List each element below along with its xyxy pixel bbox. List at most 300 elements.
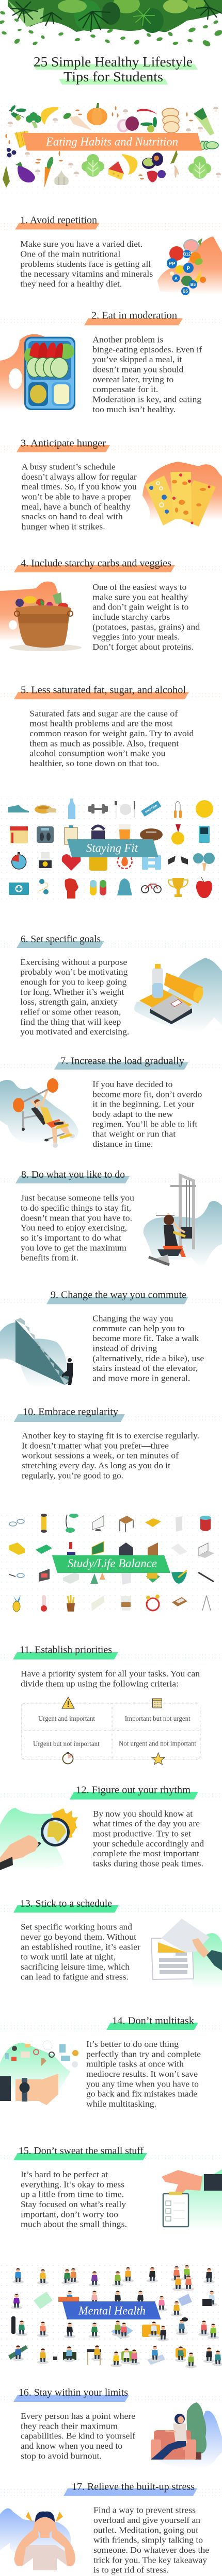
heading: [0, 1169, 222, 1183]
icon: bench press: [0, 1078, 78, 1148]
text block: them as much as possible. Also, frequent: [29, 738, 179, 748]
text block: problems students face is getting all: [20, 259, 151, 269]
icon: olives: [140, 117, 157, 132]
icon: boxing glove: [65, 878, 78, 899]
icon: bell: [117, 878, 132, 895]
icon: yoga mat: [89, 855, 107, 871]
icon: measuring tape: [35, 805, 56, 814]
panel: tip 3: [0, 438, 222, 532]
icon: cabinet: [148, 1543, 158, 1557]
panel: tip 13: [0, 1898, 222, 1989]
heading: 12. Figure out your rhythm: [76, 1785, 191, 1796]
icon: man climbing stairs: [0, 1318, 73, 1387]
text block: and move more in general.: [92, 1374, 190, 1383]
icon: stopwatch: [63, 1752, 73, 1764]
panel: study life balance banner: [0, 1514, 222, 1615]
icon: pumpkin: [87, 103, 107, 125]
text block: [92, 335, 202, 414]
text block: instead of driving: [92, 1344, 157, 1353]
icon: water bottle: [68, 799, 75, 819]
icon: coffee cup: [121, 1596, 131, 1611]
icon: gold medal: [171, 824, 184, 845]
text block: loss, strength gain, anxiety: [20, 997, 118, 1007]
icon: cucumber: [200, 141, 218, 149]
icon: vitamin foods: B5: [183, 289, 188, 294]
text block: Changing the way you: [92, 1314, 173, 1323]
matrix labels: Important but not urgent: [125, 1715, 191, 1722]
text block: [22, 462, 137, 532]
panel: tip 12: [0, 1785, 222, 1871]
text block: You need to enjoy exercising,: [21, 1223, 127, 1233]
text block: Find a way to prevent stress: [93, 2505, 196, 2515]
text block: become more fit, don’t overdo: [92, 1089, 202, 1099]
icon: thermometer: [41, 1595, 47, 1612]
ribbon: Staying Fit: [86, 842, 138, 855]
icon: folder: [145, 1518, 161, 1527]
icon: red beaker: [200, 1516, 211, 1531]
text block: common reason for weight gain. Try to avoid: [29, 728, 194, 738]
text block: [86, 2039, 201, 2109]
icon: protein bar: PROTEIN: [145, 804, 158, 814]
icon: shoe: [8, 805, 29, 812]
text block: By now you should know at: [93, 1809, 193, 1819]
icon: mat bottle and scale: [134, 958, 222, 1033]
text block: most productive. Try to set: [93, 1829, 191, 1838]
matrix labels: Not urgent and not important: [119, 1739, 196, 1748]
panel: mental health banner: [0, 2262, 222, 2368]
text block: binge-eating episodes. Even if: [92, 345, 202, 354]
panel: tip 14: [0, 2015, 222, 2109]
icon: supplement jar: [39, 852, 52, 871]
text block: multiple tasks at once with: [86, 2059, 184, 2069]
heading: [0, 1290, 222, 1304]
text block: become more fit. Take a walk: [92, 1333, 199, 1343]
text block: One of the easiest ways to: [92, 582, 186, 592]
ribbon: [52, 1555, 170, 1573]
panel: staying fit banner: [0, 799, 222, 900]
text block: and don’t gain weight is to: [92, 602, 188, 612]
icon: jump rope: [174, 802, 182, 818]
icon: banana: [122, 154, 137, 175]
text block: for long. Whether it’s weight: [20, 987, 124, 997]
icon: football: [140, 828, 163, 841]
text block: you any time when you have to: [86, 2079, 199, 2089]
icon: vitamin foods: P: [187, 266, 191, 272]
icon group: row 3 people: [11, 2316, 219, 2341]
text block: [21, 2170, 127, 2229]
text block: tasks during those peak times.: [93, 1859, 203, 1868]
text block: (potatoes, pastas, grains) and: [92, 622, 200, 632]
text block: go back and fix mistakes made: [86, 2089, 197, 2099]
icon: herb sprig: [170, 149, 178, 164]
text block: body adapt to the new: [92, 1109, 173, 1119]
text block: doesn’t mean you should: [92, 365, 184, 374]
icon: dumbbell: [88, 804, 108, 814]
text block: A busy student’s schedule: [22, 462, 116, 472]
icon: blueberries: [7, 148, 17, 158]
icon: fire ring: [118, 854, 132, 869]
ribbon: Mental Health: [78, 2304, 146, 2317]
icon: medal: [13, 1595, 21, 1612]
icon: chalkboard: [92, 1541, 104, 1555]
heading: 6. Set specific goals: [21, 934, 101, 945]
heading: 8. Do what you like to do: [21, 1169, 125, 1180]
heading: 4. Include starchy carbs and veggies: [21, 557, 171, 569]
icons: nuts: [5, 106, 193, 179]
text block: someone. Do whatever does the: [93, 2545, 209, 2555]
text block: compensate for it.: [92, 384, 158, 394]
icon: garlic: [54, 170, 69, 185]
icon: calendar page: [151, 1919, 222, 1989]
icon: flasks: [90, 1572, 105, 1584]
panel: tip 10: [0, 1406, 222, 1480]
icon: stopwatch: [12, 852, 26, 869]
text block: meal times. So, if you know you: [22, 482, 137, 492]
icon: music player: [199, 826, 210, 843]
icon: trophy: [168, 878, 188, 897]
icon: vitamin foods: [157, 236, 222, 295]
text block: and know when you need to: [21, 2441, 122, 2451]
text block: to do specific things to stay fit,: [21, 1203, 131, 1213]
text block: Set specific working hours and: [21, 1922, 133, 1932]
text block: you motivated and exercising.: [20, 1027, 129, 1037]
icon: herb: [3, 166, 10, 188]
icon: microscope: [67, 1542, 75, 1555]
text block: [93, 1809, 204, 1868]
text block: Moderation is key, and eating: [92, 395, 201, 404]
text block: that weight or run that: [92, 1129, 176, 1139]
text block: overload and give yourself an: [93, 2515, 200, 2525]
title: Tips for Students: [64, 69, 163, 84]
text block: It’s hard to be perfect at: [21, 2170, 108, 2179]
icon: ticket: [91, 1596, 104, 1611]
text block: is to get rid of stress.: [93, 2565, 169, 2575]
icon: avocado: [142, 152, 163, 169]
heading: 10. Embrace regularity: [23, 1406, 118, 1418]
heading: 1. Avoid repetition: [20, 215, 97, 226]
text block: Saturated fats and sugar are the cause of: [29, 708, 178, 718]
icon: desk lamp: [66, 1514, 78, 1533]
heading: [0, 1898, 222, 1913]
text block: up a little from time to time.: [21, 2190, 124, 2199]
icon: pencil cup: [67, 1595, 75, 1612]
icon: pills: [90, 880, 106, 895]
icon: bathroom scale: [37, 826, 54, 843]
icon: ping pong paddles: [193, 853, 215, 871]
heading: 5. Less saturated fat, sugar, and alcohol: [21, 684, 186, 696]
icon: first aid kit: [9, 883, 29, 895]
text block: [22, 1431, 199, 1480]
text block: Exercising without a purpose: [20, 957, 127, 967]
text block: while multitasking.: [86, 2099, 156, 2109]
icon: kettlebell: [91, 826, 105, 841]
text block: divide them up using the following criteria:: [21, 1679, 179, 1688]
text block: stairs instead of the elevator,: [92, 1363, 198, 1373]
icon: juice glass: [119, 824, 131, 841]
icon group: row 1 people: [12, 2265, 215, 2291]
icon: school building: [146, 1572, 160, 1583]
text block: include starchy carbs: [92, 612, 170, 622]
icon: snack bars: [142, 462, 222, 527]
text block: won’t be able to have a proper: [22, 492, 131, 502]
text block: stretching every day. As long as you do it: [22, 1461, 170, 1470]
icon: chili: [137, 109, 157, 114]
icon: lettuce: [188, 156, 211, 179]
table: priority matrix: [22, 1697, 200, 1765]
text block: workout sessions a week, or ten minutes of: [22, 1451, 179, 1461]
text block: make sure you eat healthy: [92, 592, 188, 602]
text block: most health problems and are the most: [29, 719, 173, 728]
text block: the necessary vitamins and minerals: [20, 269, 153, 279]
text block: they reach their maximum: [21, 2421, 118, 2431]
heading: 16. Stay within your limits: [19, 2387, 128, 2398]
icon: school bus: [9, 1543, 25, 1555]
icon: checkered flags: [168, 856, 188, 865]
text block: [29, 708, 194, 768]
text block: sacrificing leisure time, which: [21, 1962, 130, 1972]
icon: stressed person: [0, 2509, 75, 2570]
text block: [21, 2411, 136, 2461]
text block: [21, 1922, 141, 1981]
icon: eggplant: [15, 162, 35, 182]
icon group: row 2 people: [11, 2291, 217, 2316]
text block: an established routine, it’s easier: [21, 1942, 141, 1952]
panel: tip 6: [0, 934, 222, 1037]
icon: pen: [198, 1572, 214, 1582]
text block: complete the most important: [93, 1849, 199, 1858]
ribbon: [22, 133, 202, 150]
icon: vitamin foods: PP: [168, 261, 176, 267]
text block: important, don’t worry too: [21, 2209, 118, 2219]
heading: 13. Stick to a schedule: [20, 1898, 112, 1909]
text block: so it’s important to do what: [21, 1233, 121, 1243]
heading: [0, 557, 222, 572]
text block: [92, 582, 200, 652]
text block: If you have decided to: [92, 1079, 172, 1089]
text block: Have a priority system for all your tasks. You can: [21, 1669, 200, 1679]
icon: compass: [202, 1596, 211, 1611]
icon: leek: [194, 108, 214, 135]
text block: much about the small things.: [21, 2219, 127, 2229]
panel: tip 1: [0, 215, 222, 295]
panel: tip 2: [0, 310, 222, 414]
text block: regularly, you’re good to go.: [22, 1470, 123, 1480]
icon: lat pulldown machine: [144, 1173, 222, 1267]
panel: tip 11: [0, 1645, 222, 1765]
panel: tip 4: [0, 557, 222, 652]
text block: Every person has a point where: [21, 2411, 135, 2421]
icon: strawberry and plum: [147, 170, 166, 182]
text block: probably won’t be motivating: [20, 967, 128, 977]
matrix labels: Urgent but not important: [33, 1740, 100, 1748]
title: [33, 54, 198, 84]
text block: they need for a healthy diet.: [20, 279, 122, 289]
text block: capabilities. Be kind to yourself: [21, 2431, 136, 2441]
heading: 2. Eat in moderation: [91, 310, 177, 321]
icon: document: [176, 1516, 182, 1532]
icon: paper: [121, 1572, 131, 1585]
text block: [21, 1669, 200, 1688]
icon: computer: [39, 1569, 50, 1582]
text block: distance in time.: [92, 1139, 153, 1149]
text block: trick for you. The key takeaway: [93, 2555, 208, 2565]
text block: Just because someone tells you: [21, 1193, 134, 1203]
text block: Make sure you have a varied diet.: [20, 239, 142, 249]
ribbon: Study/Life Balance: [68, 1557, 157, 1570]
text block: snacks on hand to deal with: [22, 512, 123, 521]
text block: relief or some other reason,: [20, 1007, 121, 1017]
icon: parsnip: [62, 112, 92, 130]
panel: tip 17: [0, 2481, 222, 2575]
text block: you love to get the maximum: [21, 1243, 126, 1252]
heading: 15. Don’t sweat the small stuff: [19, 2145, 144, 2157]
heading: [0, 934, 222, 948]
heading: [0, 438, 222, 452]
icon: vitamin foods: B6: [191, 282, 196, 287]
icon: heart: [62, 854, 81, 871]
heading: [0, 2015, 222, 2030]
icon: banana: [41, 107, 58, 125]
text block: Don’t forget about proteins.: [92, 642, 194, 652]
icon: tennis ball: [196, 800, 213, 818]
heading: [0, 1406, 222, 1422]
icon: glasses: [9, 1519, 24, 1526]
text block: veggies into your meals.: [92, 632, 180, 642]
icon: calendar: [10, 826, 28, 843]
text block: It doesn’t matter what you prefer—three: [22, 1440, 169, 1450]
ribbon: Eating Habits and Nutrition: [45, 135, 178, 148]
text block: stop to avoid burnout.: [21, 2451, 102, 2461]
text block: One of the main nutritional: [20, 249, 121, 259]
text block: can lead to fatigue and stress.: [21, 1972, 129, 1981]
text block: [20, 957, 129, 1037]
icon: book stack: [119, 1543, 133, 1557]
text block: Another key to staying fit is to exercise regularly.: [22, 1431, 199, 1440]
text block: you’ve skipped a meal, it: [92, 354, 182, 364]
header foliage: [0, 0, 222, 47]
text block: [93, 2505, 209, 2575]
text block: benefits from it.: [21, 1253, 78, 1263]
text block: it in the beginning. Let your: [92, 1099, 195, 1109]
heading: [0, 215, 222, 230]
icon: monitor: [92, 1516, 104, 1531]
panel: tip 16: [0, 2387, 222, 2469]
icons: mushrooms: [8, 107, 221, 178]
icon: bicycle: [141, 884, 161, 893]
heading: 9. Change the way you commute: [51, 1290, 186, 1301]
text block: doesn’t mean that you have to.: [21, 1213, 132, 1223]
icon: star: [152, 1753, 165, 1765]
text block: regimen. You’ll be able to lift: [92, 1119, 198, 1129]
panel: tip 5: [0, 684, 222, 768]
heading: [0, 2387, 222, 2402]
icon: bread: [162, 108, 179, 133]
icon group: row 4 people: [8, 2345, 222, 2368]
icon: vitamin foods: A: [175, 276, 178, 281]
text block: (alternatively, ride a bike), use: [92, 1353, 204, 1363]
icon: projector: [63, 1572, 79, 1584]
icon: mortar: [171, 1570, 187, 1584]
text block: mediocre results. It won’t save: [86, 2069, 198, 2079]
text block: never go beyond them. Without: [21, 1932, 136, 1942]
icon: lettuce: [82, 154, 104, 177]
icon: person on armchair: [151, 2402, 222, 2469]
icon: clipboard: [65, 825, 77, 844]
icon: vitamin foods: B12: [183, 252, 191, 257]
icon: carrot: [44, 156, 55, 188]
icon: protein bar: [141, 801, 161, 817]
icon: watch and tasks: [0, 2041, 78, 2105]
text block: Stay focused on what’s really: [21, 2199, 126, 2209]
text block: meal, have a bunch of healthy: [22, 502, 131, 512]
text block: with friends, simply talking to: [93, 2535, 203, 2545]
heading: 14. Don’t multitask: [112, 2015, 194, 2026]
text block: Another problem is: [92, 335, 163, 344]
icon: broccoli: [26, 112, 41, 128]
text block: outlet. Meditation, going out: [93, 2525, 198, 2535]
text block: alcohol consumption won’t make you: [29, 749, 165, 758]
heading: [0, 2481, 222, 2496]
icon: alarm clock: [146, 1595, 160, 1611]
panel: tip 9: [0, 1290, 222, 1387]
title: 25 Simple Healthy Lifestyle: [34, 54, 193, 70]
text block: your schedule accordingly and: [93, 1839, 204, 1849]
icon: plate and cutlery: [115, 801, 135, 818]
icon: corn: [14, 131, 30, 148]
icon: calendar: [153, 1699, 162, 1708]
text block: doesn’t always allow for regular: [22, 472, 137, 482]
ribbon: [67, 839, 158, 857]
panel: eating habits banner: [0, 103, 222, 193]
icon: warning: [62, 1697, 74, 1708]
icon: test tube: [41, 1514, 47, 1533]
icon: magnifier and sun: [0, 1808, 78, 1871]
heading: 17. Relieve the built-up stress: [72, 2481, 195, 2493]
text block: to work until late at night,: [21, 1952, 116, 1962]
heading: [0, 2145, 222, 2160]
panel: tip 8: [0, 1169, 222, 1267]
text block: what times of the day you are: [93, 1819, 200, 1828]
heading: [0, 310, 222, 325]
icon: laptop: [199, 1543, 214, 1558]
icon: desk: [172, 1597, 187, 1606]
icon: hand and checklist: [162, 2169, 222, 2230]
icon: map pins: [38, 879, 49, 894]
heading: [0, 1785, 222, 1800]
icon: olive branch: [9, 105, 26, 121]
text block: It’s better to do one thing: [86, 2039, 179, 2049]
icon: apple: [196, 877, 212, 898]
icon: open book: [171, 1544, 187, 1555]
heading: 3. Anticipate hunger: [21, 438, 106, 449]
text block: perfectly than try and complete: [86, 2049, 201, 2059]
icon: blue dumbbells: [142, 855, 161, 870]
icon: onion: [117, 116, 139, 132]
icon: desk: [119, 1516, 134, 1532]
matrix labels: [33, 1715, 196, 1748]
panel: tip 7: [0, 1055, 222, 1149]
text block: [21, 1193, 134, 1263]
ribbon: [62, 2301, 161, 2319]
matrix labels: Urgent and important: [38, 1715, 95, 1722]
icon: glasses: [9, 1573, 24, 1578]
text block: enough for you to keep going: [20, 977, 126, 987]
text block: healthier, so tone down on that too.: [29, 758, 159, 768]
text block: overeat later, trying to: [92, 375, 173, 384]
heading: [0, 684, 222, 699]
heading: [0, 1645, 222, 1659]
text block: everything. It’s okay to mess: [21, 2179, 124, 2189]
